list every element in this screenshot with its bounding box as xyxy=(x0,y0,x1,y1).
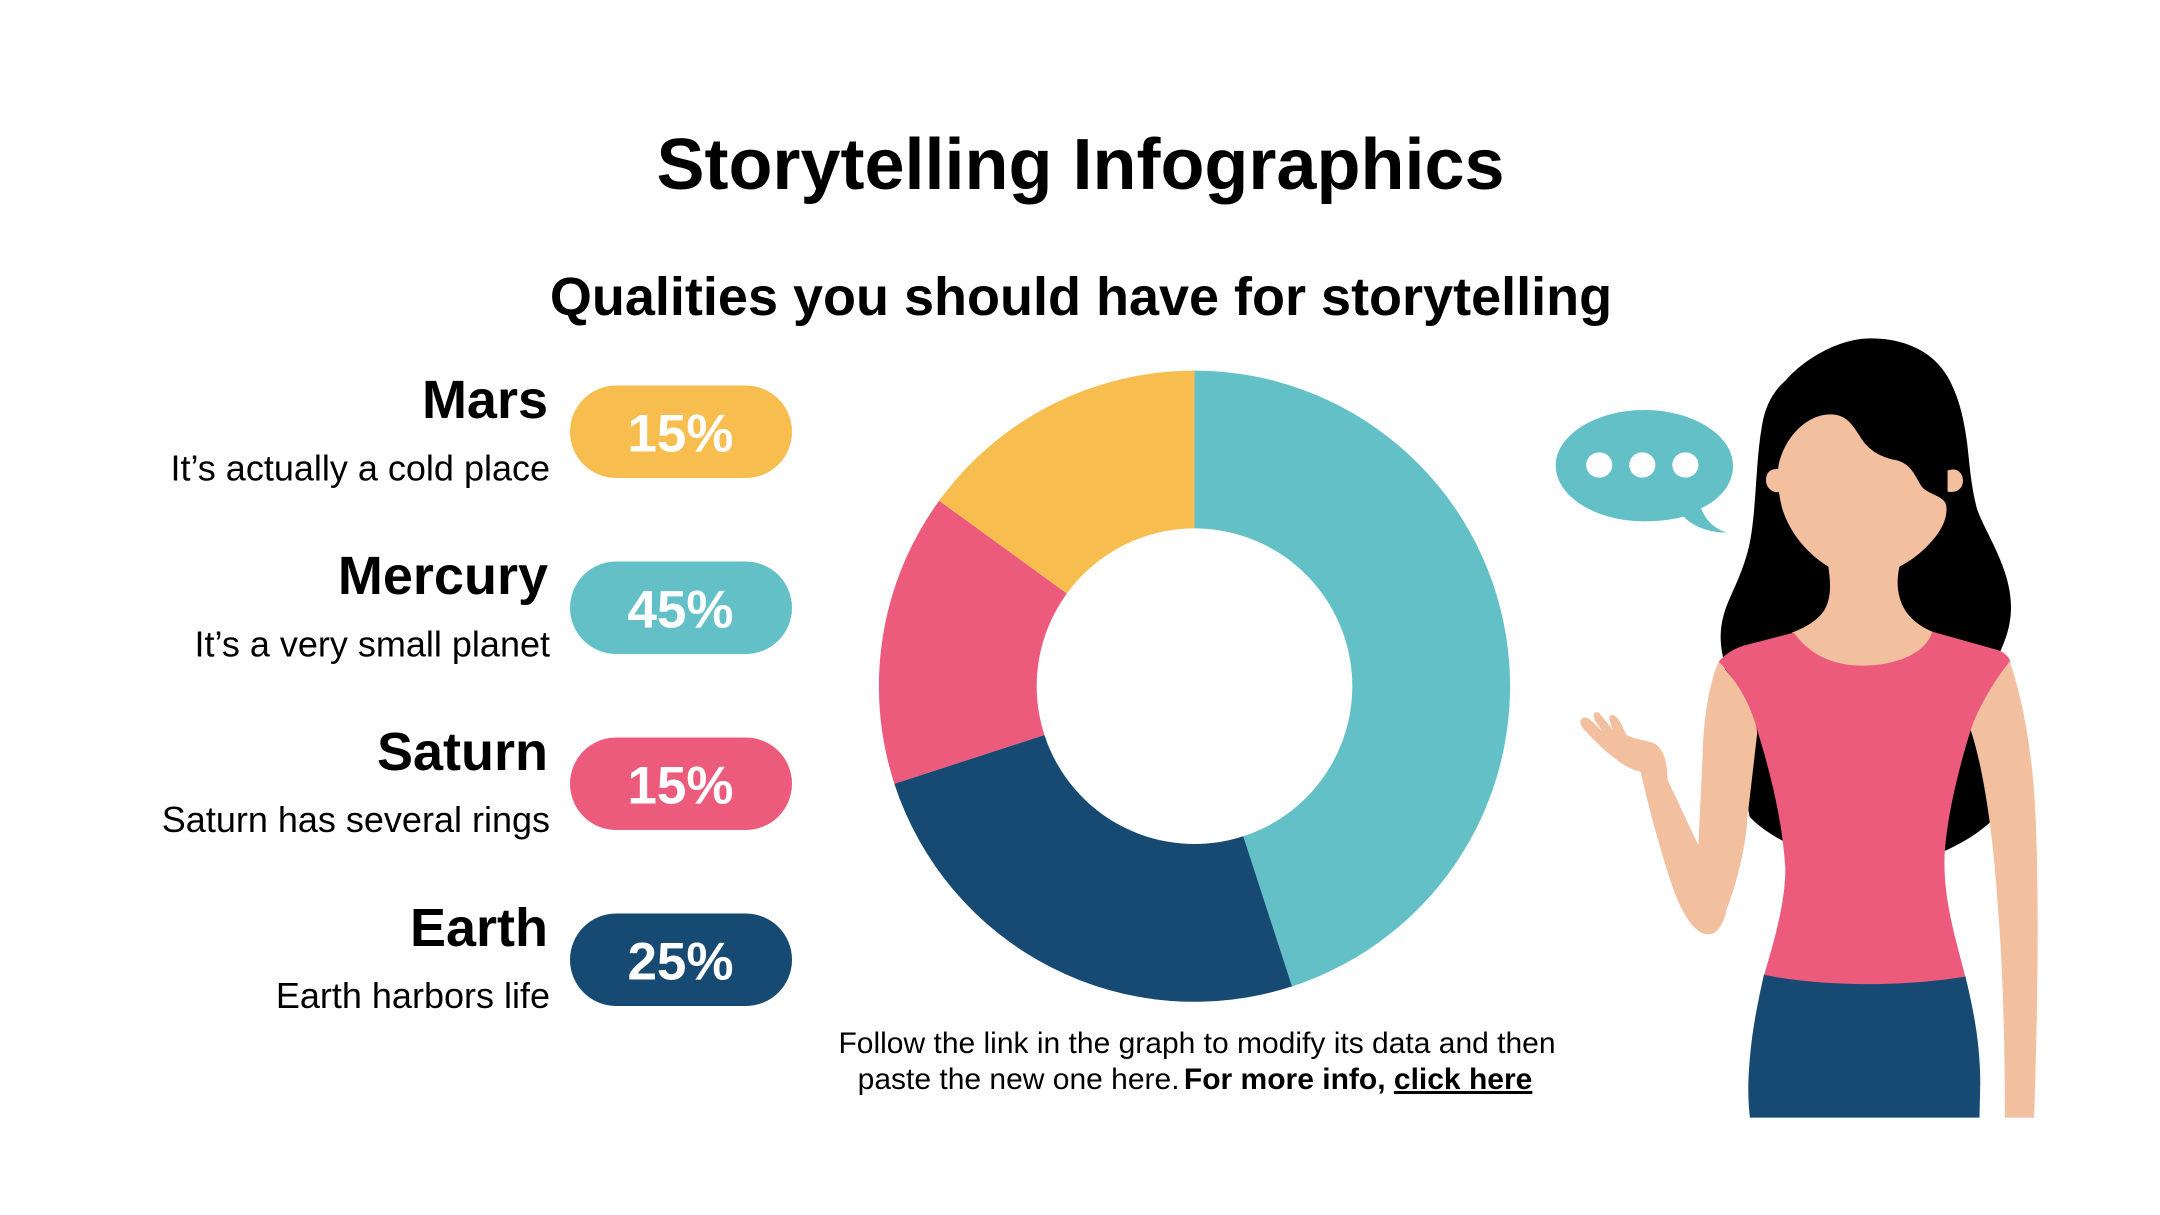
pill: Mercury 45%: 45% xyxy=(627,580,734,640)
donut chart xyxy=(879,371,1510,1002)
description: Earth: Earth harbors life xyxy=(276,975,550,1016)
legend item: Earth xyxy=(276,898,792,1016)
ear left xyxy=(1766,469,1779,492)
title: Storytelling Infographics xyxy=(656,125,1505,205)
pill: Mars 15%: 15% xyxy=(627,404,734,464)
label: Saturn: Saturn xyxy=(377,722,548,782)
slice: Mercury 45% xyxy=(1194,371,1510,986)
slice: Saturn 15% xyxy=(879,501,1067,784)
pill: Mercury 45% xyxy=(570,562,792,654)
face and neck xyxy=(1778,414,1947,687)
footnote: paste the new one here. xyxy=(858,1063,1188,1096)
skirt xyxy=(1748,974,1980,1118)
label: Mars: Mars xyxy=(422,370,548,430)
pill: Earth 25%: 25% xyxy=(627,932,734,992)
top xyxy=(1719,632,2010,984)
legend item: Mercury xyxy=(195,546,792,664)
description: Saturn: Saturn has several rings xyxy=(162,799,550,840)
arm right xyxy=(1965,660,2038,1118)
woman illustration xyxy=(1580,338,2038,1118)
slice: Earth 25% xyxy=(894,735,1292,1002)
pill: Saturn 15%: 15% xyxy=(627,756,734,816)
description: Mars: It’s actually a cold place xyxy=(170,448,550,488)
hair xyxy=(1721,338,2011,851)
footnote: For more info, click here xyxy=(1184,1063,1532,1096)
ear right xyxy=(1948,469,1963,492)
label: Mercury: Mercury xyxy=(338,546,548,606)
legend item: Mars xyxy=(170,370,792,488)
speech bubble xyxy=(1556,410,1733,533)
description: Mercury: It’s a very small planet xyxy=(195,624,550,664)
legend item: Saturn xyxy=(162,722,792,840)
pill: Earth 25% xyxy=(570,914,792,1006)
footnote: Follow the link in the graph to modify its data and then xyxy=(838,1027,1556,1060)
subtitle: Qualities you should have for storytelling xyxy=(550,267,1612,327)
pill: Saturn 15% xyxy=(570,738,792,830)
arm left with hand xyxy=(1580,662,1757,934)
slice: Mars 15% xyxy=(939,371,1194,593)
pill: Mars 15% xyxy=(570,386,792,478)
label: Earth: Earth xyxy=(410,898,548,958)
